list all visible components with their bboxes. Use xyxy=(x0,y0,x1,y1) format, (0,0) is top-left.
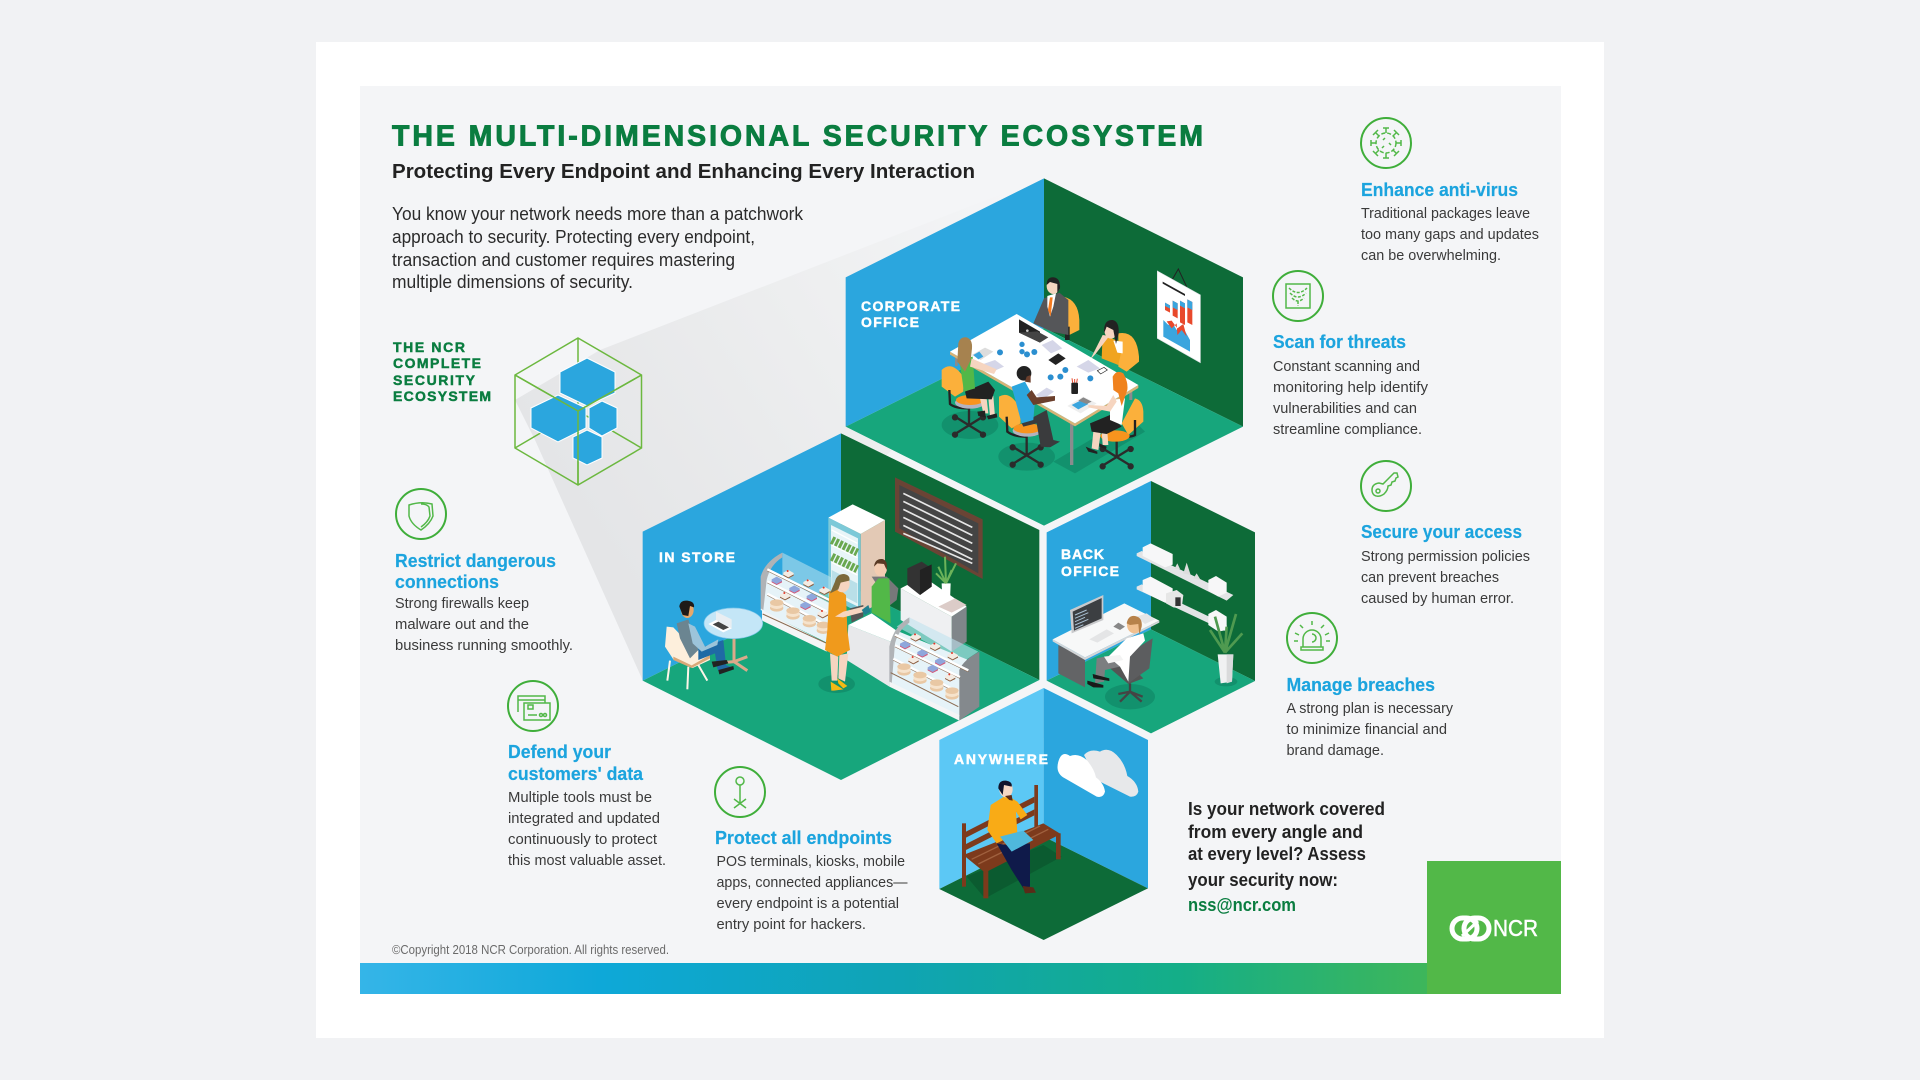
item: enhance anti-virus: too many gaps and updates xyxy=(1361,226,1539,243)
label: back office: OFFICE xyxy=(1061,563,1119,579)
item: restrict dangerous connections: business running smoothly. xyxy=(395,637,573,654)
item: protect all endpoints: Protect all endpoints xyxy=(715,828,892,848)
room: in store xyxy=(643,433,1039,780)
woman with red hair xyxy=(1086,372,1143,468)
item: restrict dangerous connections: Strong firewalls keep xyxy=(395,595,529,612)
item: manage breaches: to minimize financial and xyxy=(1286,721,1447,738)
ecosystem label: SECURITY xyxy=(393,372,476,388)
wall shelves xyxy=(1137,543,1233,632)
item: defend customers' data: this most valuable asset. xyxy=(508,852,666,869)
label: corporate office: OFFICE xyxy=(861,314,919,330)
room: corporate office xyxy=(846,178,1243,526)
conference table xyxy=(950,314,1138,465)
item: enhance anti-virus xyxy=(1361,118,1539,264)
item: manage breaches xyxy=(1286,613,1453,759)
fridge xyxy=(828,504,885,613)
item: restrict dangerous connections: Restrict dangerous xyxy=(395,551,556,571)
item: defend customers' data xyxy=(508,681,666,869)
woman in green xyxy=(942,337,997,437)
icon: shield xyxy=(396,489,446,539)
ecosystem label xyxy=(393,339,491,404)
NCR wordmark: NCR xyxy=(1493,915,1538,941)
icon: key xyxy=(1361,461,1411,511)
projection beam from cube xyxy=(515,188,1044,681)
label: anywhere: ANYWHERE xyxy=(954,751,1048,767)
woman in yellow xyxy=(1090,320,1139,372)
office worker in chair xyxy=(1087,616,1155,709)
item: manage breaches: brand damage. xyxy=(1286,742,1384,759)
item: defend customers' data: customers' data xyxy=(508,764,644,784)
item: restrict dangerous connections: connections xyxy=(395,572,499,592)
item: protect all endpoints xyxy=(715,767,908,933)
item: scan for threats: streamline compliance. xyxy=(1273,421,1422,438)
item: protect all endpoints: POS terminals, kiosks, mobile xyxy=(716,853,905,870)
item: defend customers' data: integrated and updated xyxy=(508,810,660,827)
table items xyxy=(972,319,1107,413)
item: protect all endpoints: apps, connected appliances— xyxy=(716,874,908,891)
icon: ecosystem cube xyxy=(515,338,642,485)
call to action: Is your network covered xyxy=(1188,799,1385,819)
ecosystem label: COMPLETE xyxy=(393,355,481,371)
white card xyxy=(316,42,1604,1038)
chalkboard menu xyxy=(895,477,983,579)
desk with monitor xyxy=(1053,595,1159,687)
item: defend customers' data: Defend your xyxy=(508,742,611,762)
title: THE MULTI-DIMENSIONAL SECURITY ECOSYSTEM xyxy=(392,120,1203,152)
icon: scan xyxy=(1273,271,1323,321)
label: back office: BACK xyxy=(1061,546,1104,562)
item: restrict dangerous connections xyxy=(395,489,573,654)
intro text xyxy=(392,204,804,292)
potted plant xyxy=(1210,614,1242,686)
intro text: multiple dimensions of security. xyxy=(392,272,633,292)
seated man on phone xyxy=(987,781,1036,893)
item: scan for threats: Constant scanning and xyxy=(1273,358,1420,375)
icon: endpoint pin xyxy=(715,767,765,817)
label: corporate office: CORPORATE xyxy=(861,298,960,314)
gradient footer bar xyxy=(360,963,1561,994)
item: secure your access: Strong permission policies xyxy=(1361,548,1530,565)
man in blue xyxy=(999,366,1060,467)
item: secure your access: can prevent breaches xyxy=(1361,569,1499,586)
intro text: transaction and customer requires mastering xyxy=(392,250,735,270)
ecosystem label: ECOSYSTEM xyxy=(393,388,491,404)
item: defend customers' data: continuously to protect xyxy=(508,831,658,848)
panel: infographic sheet xyxy=(360,86,1561,993)
item: defend customers' data: Multiple tools must be xyxy=(508,789,652,806)
subtitle: Protecting Every Endpoint and Enhancing Every Interaction xyxy=(392,161,975,183)
wooden bench xyxy=(962,785,1061,898)
label: back office xyxy=(1061,546,1119,579)
bench shadow xyxy=(967,845,1062,898)
icon: virus xyxy=(1361,118,1411,168)
item: manage breaches: A strong plan is necessary xyxy=(1286,700,1453,717)
label: corporate office xyxy=(861,298,960,330)
barista xyxy=(872,559,898,623)
label: in store: IN STORE xyxy=(659,549,735,565)
floor shadows xyxy=(942,411,1145,473)
item: scan for threats: monitoring help identify xyxy=(1273,379,1428,396)
customer in orange dress xyxy=(818,574,871,693)
item: enhance anti-virus: Enhance anti-virus xyxy=(1361,180,1518,200)
ecosystem label: THE NCR xyxy=(393,339,465,355)
icon: cards xyxy=(508,681,558,731)
back counter with coffee machine xyxy=(901,557,967,652)
item: protect all endpoints: entry point for hackers. xyxy=(716,916,866,933)
call to action: at every level? Assess xyxy=(1188,844,1366,864)
logo block xyxy=(1427,861,1561,994)
call to action: from every angle and xyxy=(1188,822,1363,842)
poster chart xyxy=(1157,269,1200,363)
room: back office xyxy=(1047,481,1255,733)
item: enhance anti-virus: Traditional packages leave xyxy=(1361,205,1530,222)
item: enhance anti-virus: can be overwhelming. xyxy=(1361,247,1501,264)
item: scan for threats: vulnerabilities and can xyxy=(1273,400,1417,417)
item: manage breaches: Manage breaches xyxy=(1286,675,1435,695)
clouds xyxy=(1057,750,1138,797)
call to action: your security now: xyxy=(1188,870,1338,890)
item: secure your access: Secure your access xyxy=(1361,522,1522,542)
call to action xyxy=(1188,799,1385,915)
room: anywhere xyxy=(939,688,1148,940)
call to action: nss@ncr.com xyxy=(1188,895,1296,915)
service counter and register xyxy=(847,605,896,687)
item: scan for threats xyxy=(1273,271,1428,438)
display case right xyxy=(889,617,979,721)
icon: NCR rings xyxy=(1452,918,1489,939)
seated man with table xyxy=(665,601,763,689)
item: scan for threats: Scan for threats xyxy=(1273,332,1406,352)
display case left xyxy=(761,553,833,652)
item: secure your access xyxy=(1361,461,1530,607)
intro text: approach to security. Protecting every endpoint, xyxy=(392,227,755,247)
room labels xyxy=(659,298,1119,767)
item: protect all endpoints: every endpoint is a potential xyxy=(716,895,899,912)
item: secure your access: caused by human error. xyxy=(1361,590,1514,607)
copyright: ©Copyright 2018 NCR Corporation. All rights reserved. xyxy=(392,943,669,957)
item: restrict dangerous connections: malware out and the xyxy=(395,616,529,633)
icon: alarm xyxy=(1287,613,1337,663)
man in suit xyxy=(1033,277,1079,340)
intro text: You know your network needs more than a patchwork xyxy=(392,204,804,224)
